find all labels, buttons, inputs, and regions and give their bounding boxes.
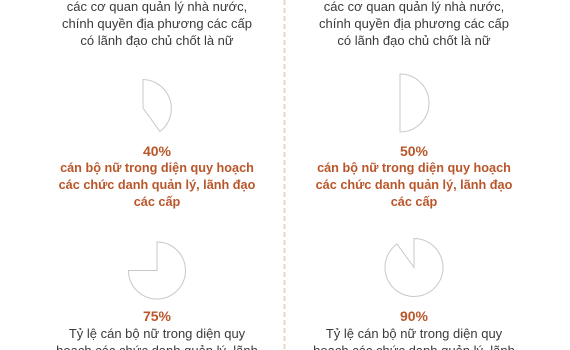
text block: 50% statistic: các cấp [391,195,437,209]
text block: 40% statistic [59,143,255,209]
text block: top left description: có lãnh đạo chủ chốt là nữ [80,33,234,48]
text block: 40% statistic: cán bộ nữ trong diện quy hoạch [60,161,254,175]
pie icon: 90% [385,238,443,297]
text block: top right description: chính quyền địa phương các cấp [319,16,509,31]
text block: top left description [62,0,252,48]
text block: 90% statistic: 90% [400,308,428,324]
pie icon: 75% [128,242,186,299]
text block: 90% statistic: Tỷ lệ cán bộ nữ trong diện quy [326,326,502,341]
text block: 40% statistic: 40% [143,143,171,159]
text block: 90% statistic [313,308,515,350]
text block: 75% statistic: 75% [143,308,171,324]
text block: 50% statistic: cán bộ nữ trong diện quy hoạch [317,161,511,175]
text block: 75% statistic [56,308,258,350]
pie icon: 40% [143,80,171,132]
text block: 40% statistic: các cấp [134,195,180,209]
text block: 50% statistic: các chức danh quản lý, lãnh đạo [316,178,512,192]
text block: 50% statistic [316,143,512,209]
text block: top right description [319,0,509,48]
text block: 75% statistic: Tỷ lệ cán bộ nữ trong diện quy [69,326,245,341]
pie icon: 50% [400,74,429,132]
text block: top left description: chính quyền địa phương các cấp [62,16,252,31]
text block: 40% statistic: các chức danh quản lý, lãnh đạo [59,178,255,192]
text block: 50% statistic: 50% [400,143,428,159]
text block: top right description: có lãnh đạo chủ chốt là nữ [337,33,491,48]
